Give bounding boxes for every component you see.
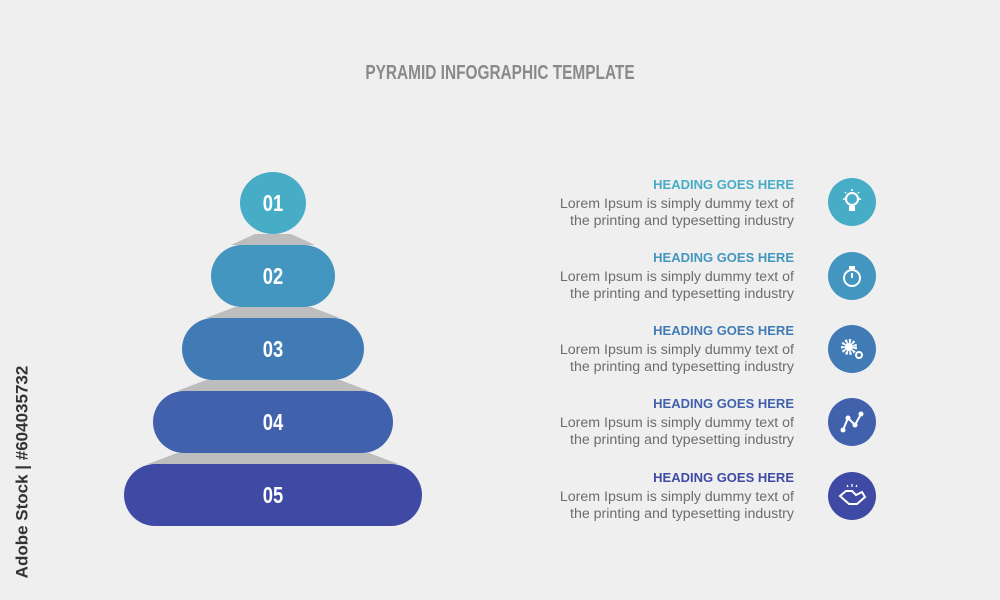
- text block 5: the printing and typesetting industry: [570, 506, 794, 522]
- text block 5: HEADING GOES HERE: [653, 470, 794, 485]
- text block 1: the printing and typesetting industry: [570, 212, 794, 228]
- level 3: 03: [263, 337, 283, 363]
- icon: bulb: [828, 178, 876, 226]
- text block 3: the printing and typesetting industry: [570, 358, 794, 374]
- text block 1: HEADING GOES HERE: [653, 177, 794, 192]
- text block 2: Lorem Ipsum is simply dummy text of: [560, 269, 794, 285]
- text block 5: Lorem Ipsum is simply dummy text of: [560, 489, 794, 505]
- text block 2: the printing and typesetting industry: [570, 286, 794, 302]
- text block 3: Lorem Ipsum is simply dummy text of: [560, 342, 794, 358]
- text block 3: [560, 323, 794, 374]
- text block 3: HEADING GOES HERE: [653, 323, 794, 338]
- text block 5: [560, 470, 794, 522]
- icon: gears: [828, 325, 876, 373]
- text block 4: Lorem Ipsum is simply dummy text of: [560, 415, 794, 431]
- level 1: [240, 172, 306, 234]
- level 2: 02: [263, 264, 283, 290]
- level 5: 05: [263, 483, 283, 509]
- text block 2: [560, 250, 794, 302]
- icon: stopwatch: [828, 252, 876, 300]
- level 2: [211, 245, 335, 307]
- text block 1: Lorem Ipsum is simply dummy text of: [560, 196, 794, 212]
- level 3: [182, 318, 364, 380]
- text block 2: HEADING GOES HERE: [653, 250, 794, 265]
- level 5: [124, 464, 422, 526]
- level 4: [153, 391, 393, 453]
- text block 4: the printing and typesetting industry: [570, 432, 794, 448]
- icon: chart line: [828, 398, 876, 446]
- text block 1: [560, 177, 794, 228]
- side credit: Adobe Stock | #604035732: [12, 366, 32, 578]
- level 1: 01: [263, 191, 283, 217]
- text block 4: [560, 396, 794, 448]
- title: PYRAMID INFOGRAPHIC TEMPLATE: [365, 62, 635, 84]
- level 4: 04: [263, 410, 284, 436]
- text block 4: HEADING GOES HERE: [653, 396, 794, 411]
- icon: handshake: [828, 472, 876, 520]
